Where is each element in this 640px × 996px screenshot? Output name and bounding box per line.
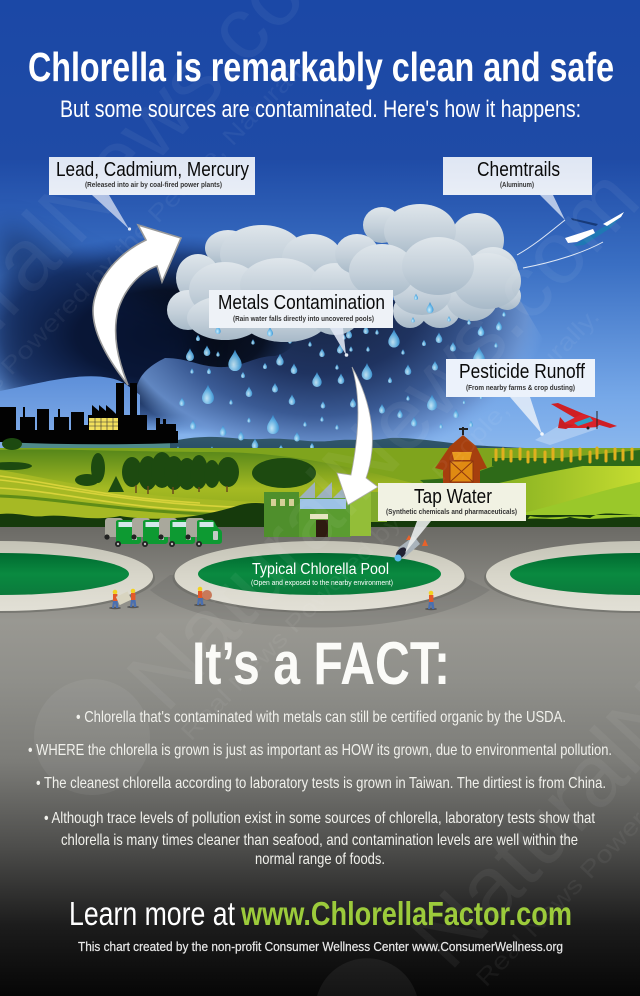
callout: Chemtrails xyxy=(443,157,592,220)
pool sublabel: (Open and exposed to the nearby environment) xyxy=(251,578,393,587)
rain drops xyxy=(176,325,498,452)
rain clouds xyxy=(167,204,521,342)
watermark text: NaturalNews.com xyxy=(107,148,640,728)
heading: It's a FACT: It’s a FACT: xyxy=(192,630,450,697)
red crop duster xyxy=(535,403,617,445)
right field xyxy=(440,456,640,528)
watermark text: Real News Powered by the People, Naturally. xyxy=(176,303,605,746)
hedge row xyxy=(0,503,640,528)
fact 4 xyxy=(44,810,595,868)
callout: Pesticide Runoff: (From nearby farms & crop dusting) xyxy=(466,383,575,392)
callout: Chemtrails: (Aluminum) xyxy=(500,180,534,189)
credit line: This chart created by the non-profit Consumer Wellness Center www.ConsumerWellness.org xyxy=(78,940,563,954)
callout: Chemtrails: Chemtrails xyxy=(477,159,560,181)
pool label: Typical Chlorella Pool xyxy=(252,561,389,578)
mountain range xyxy=(135,437,640,480)
barn xyxy=(435,427,487,490)
sky background xyxy=(0,0,640,530)
callout: Lead, Cadmium, Mercury: Lead, Cadmium, Mercury xyxy=(56,159,249,181)
arrow: smoke rising to air xyxy=(93,225,181,385)
callout: Pesticide Runoff xyxy=(446,359,595,436)
callout: Tap Water: Tap Water xyxy=(414,486,492,508)
fact 4: normal range of foods. xyxy=(255,851,385,868)
trucks xyxy=(104,518,222,547)
learn more link: Learn more at xyxy=(69,895,235,932)
callout: Lead, Cadmium, Mercury xyxy=(49,157,255,231)
learn more link: www.ChlorellaFactor.com xyxy=(240,895,572,932)
light blue horizon left xyxy=(0,376,140,460)
callout: Metals Contamination: Metals Contamination xyxy=(218,292,385,314)
pavement shadow band xyxy=(150,575,490,628)
pool: left xyxy=(0,541,155,613)
factory silhouette xyxy=(0,383,178,444)
dark smoke cloud xyxy=(0,225,385,440)
learn more link xyxy=(69,895,572,932)
callout: Metals Contamination xyxy=(209,290,393,357)
watermark globe logos xyxy=(34,679,417,996)
pool: right xyxy=(484,541,640,613)
callout: Lead, Cadmium, Mercury: (Released into air by coal-fired power plants) xyxy=(85,180,222,189)
processing plant xyxy=(264,482,387,537)
ground pavement xyxy=(0,527,640,996)
callout: Tap Water xyxy=(378,483,526,553)
pool: center xyxy=(172,541,466,613)
callout: Metals Contamination: (Rain water falls directly into uncovered pools) xyxy=(233,314,374,323)
teal lake behind factory xyxy=(10,438,170,454)
tree line xyxy=(0,438,316,494)
arrow: metals falling into pool xyxy=(337,367,378,505)
dark rain backdrop xyxy=(135,300,620,470)
green hills xyxy=(0,448,640,528)
workers xyxy=(109,587,437,610)
corn field xyxy=(492,448,640,466)
white jet xyxy=(517,212,624,268)
tap water pipe xyxy=(394,535,428,562)
factory lit windows xyxy=(89,418,118,430)
callout: Pesticide Runoff: Pesticide Runoff xyxy=(459,361,585,383)
callout: Tap Water: (Synthetic chemicals and pharmaceuticals) xyxy=(386,507,517,516)
